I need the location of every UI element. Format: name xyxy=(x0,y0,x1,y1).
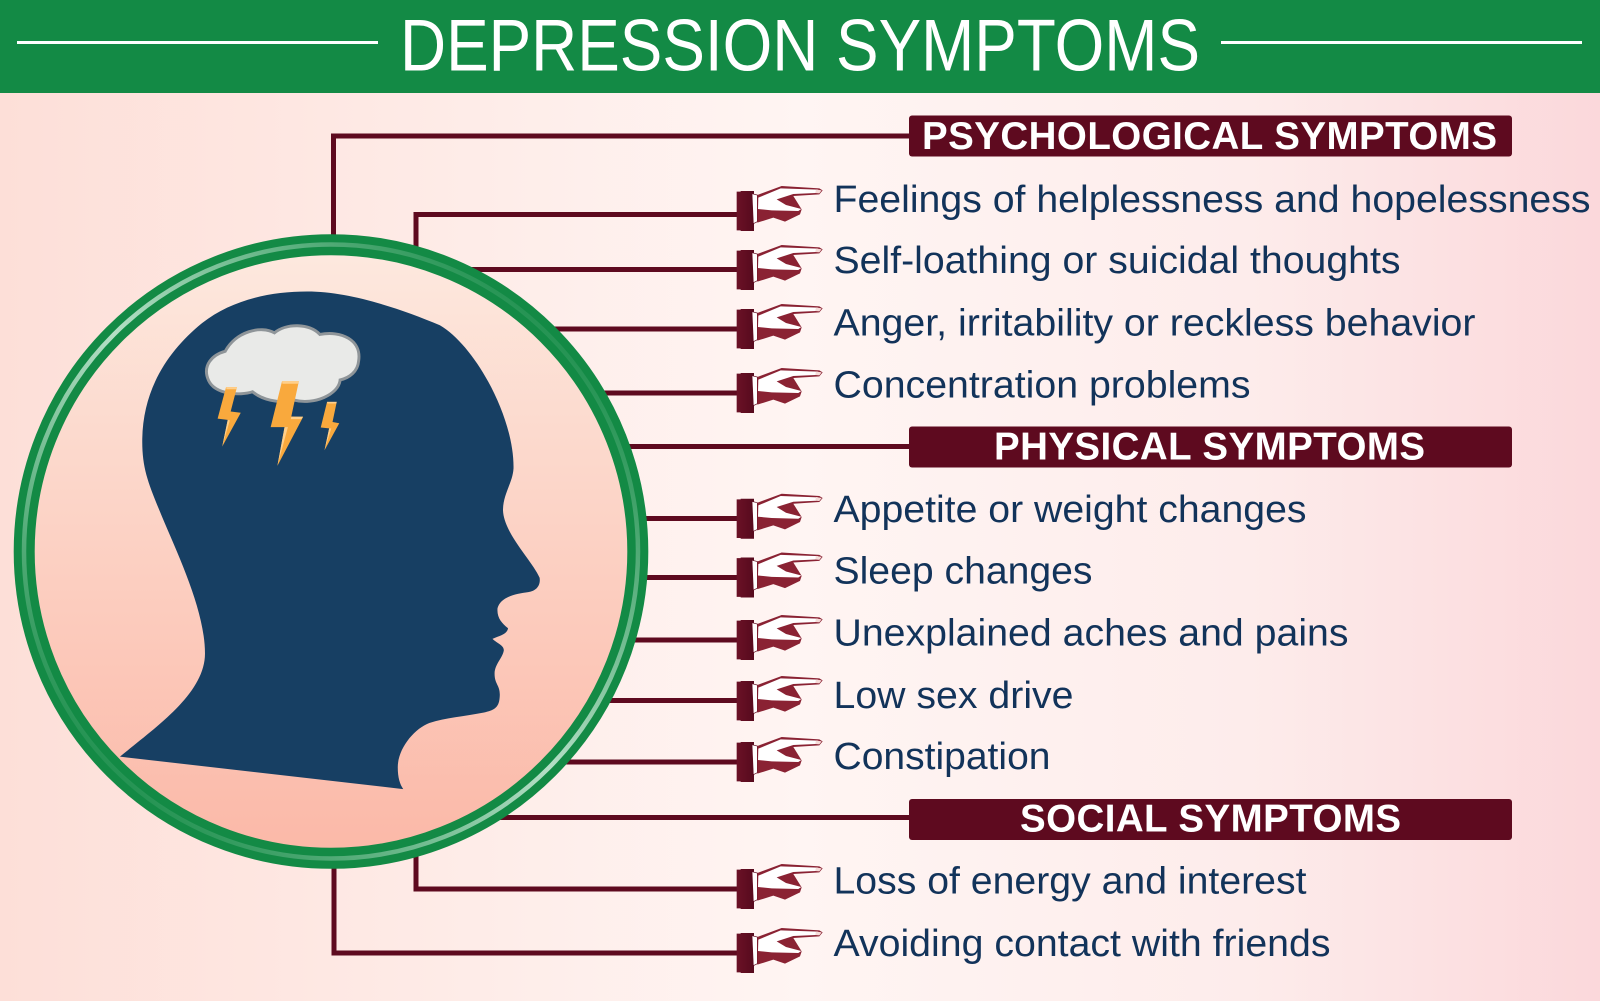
title: DEPRESSION SYMPTOMS xyxy=(400,6,1200,86)
item: self-loathing: Self-loathing or suicidal thoughts xyxy=(834,240,1400,282)
header: social symptoms: SOCIAL SYMPTOMS xyxy=(1020,798,1401,840)
item: appetite: Appetite or weight changes xyxy=(834,489,1306,531)
lightning bolts xyxy=(218,381,339,466)
item: sleep: Sleep changes xyxy=(834,550,1092,592)
head silhouette xyxy=(120,292,540,789)
item: sleep xyxy=(737,550,1092,597)
item: concentration: Concentration problems xyxy=(834,364,1250,406)
item: feelings of helplessness: Feelings of helplessness and hopelessness xyxy=(834,179,1590,221)
item: constipation xyxy=(737,736,1050,782)
item: feelings of helplessness xyxy=(737,179,1590,231)
header: social symptoms xyxy=(909,798,1512,840)
item: concentration xyxy=(737,364,1250,413)
item: loss of energy xyxy=(737,860,1307,909)
item: constipation: Constipation xyxy=(834,736,1050,778)
item: aches: Unexplained aches and pains xyxy=(834,612,1348,654)
item: self-loathing xyxy=(737,240,1400,290)
header: psychological symptoms: PSYCHOLOGICAL SYMPTOMS xyxy=(922,115,1497,158)
item: low sex drive xyxy=(737,675,1074,721)
item: anger: Anger, irritability or reckless behavior xyxy=(834,302,1476,344)
head circle xyxy=(24,244,638,858)
connector lines xyxy=(334,136,909,953)
header: physical symptoms: PHYSICAL SYMPTOMS xyxy=(994,426,1425,468)
item: loss of energy: Loss of energy and interest xyxy=(834,860,1307,902)
cloud xyxy=(206,326,359,402)
item: appetite xyxy=(737,489,1306,539)
title banner xyxy=(0,0,1600,93)
item: low sex drive: Low sex drive xyxy=(834,675,1074,717)
item: avoiding contact: Avoiding contact with friends xyxy=(834,923,1330,965)
item: avoiding contact xyxy=(737,923,1330,973)
